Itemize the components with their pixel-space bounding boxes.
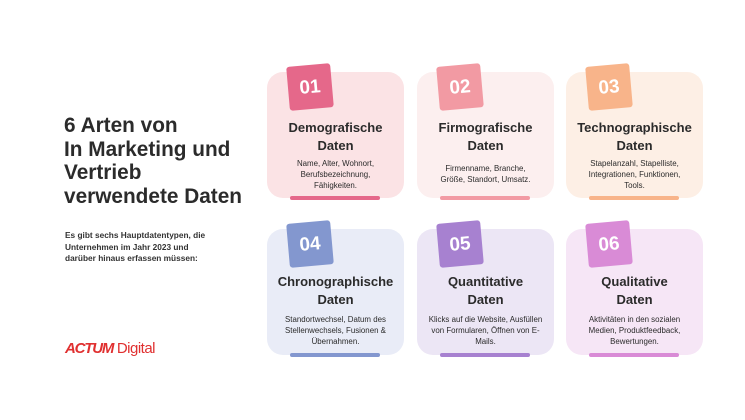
heading: Daten: [317, 138, 354, 152]
text: [297, 159, 374, 190]
heading: Daten: [616, 292, 653, 306]
badge 02: [436, 63, 484, 111]
heading: Firmografische: [439, 120, 532, 135]
panel: 02: [417, 72, 554, 198]
bar 06: [589, 353, 679, 357]
heading: [448, 274, 523, 306]
subtitle: Es gibt sechs Hauptdatentypen, die: [65, 230, 205, 240]
badge 01: 01: [299, 76, 321, 99]
text: Stapelanzahl, Stapelliste,: [590, 159, 679, 168]
text: Standortwechsel, Datum des: [285, 315, 386, 324]
heading: [278, 274, 393, 306]
panel: 05: [417, 229, 554, 355]
text: Klicks auf die Website, Ausfüllen: [429, 315, 542, 324]
heading: [577, 120, 692, 152]
badge 04: 04: [299, 233, 321, 256]
text: [285, 315, 386, 346]
heading: [439, 120, 532, 152]
text: Firmenname, Branche,: [445, 164, 526, 173]
badge 06: 06: [598, 233, 620, 256]
text: [440, 164, 530, 184]
badge 01: [286, 63, 334, 111]
title: verwendete Daten: [64, 184, 242, 208]
text: Tools.: [624, 181, 645, 190]
text: Fähigkeiten.: [314, 181, 357, 190]
bar 03: [589, 196, 679, 200]
text: Größe, Standort, Umsatz.: [441, 175, 530, 184]
bar 05: [440, 353, 530, 357]
panel: 01: [267, 72, 404, 198]
panel: 06: [566, 229, 703, 355]
heading: Chronographische: [278, 274, 393, 289]
title: [64, 114, 242, 208]
subtitle: [65, 230, 205, 263]
bar 04: [290, 353, 380, 357]
title: In Marketing und: [64, 138, 230, 160]
text: Stellenwechsels, Fusionen &: [285, 326, 386, 335]
title: Vertrieb: [64, 161, 141, 184]
logo: ACTUM Digital: [65, 340, 155, 357]
text: [589, 159, 680, 190]
heading: Daten: [467, 292, 504, 306]
heading: Daten: [317, 292, 354, 306]
title: 6 Arten von: [64, 114, 178, 137]
heading: Qualitative: [601, 274, 668, 289]
panel: 04: [267, 229, 404, 355]
badge 03: 03: [598, 76, 620, 99]
text: Bewertungen.: [610, 337, 659, 346]
heading: Daten: [467, 138, 504, 152]
bar 02: [440, 196, 530, 200]
heading: Demografische: [289, 120, 382, 135]
badge 06: [585, 220, 633, 268]
badge 04: [286, 220, 334, 268]
badge 05: 05: [449, 233, 471, 256]
heading: [601, 274, 668, 306]
heading: Daten: [616, 138, 653, 152]
badge 02: 02: [449, 76, 471, 99]
badge 05: [436, 220, 484, 268]
heading: Quantitative: [448, 274, 523, 289]
heading: Technographische: [577, 120, 692, 135]
text: Berufsbezeichnung,: [301, 170, 370, 179]
text: Medien, Produktfeedback,: [589, 326, 680, 335]
text: Mails.: [475, 337, 496, 346]
text: [429, 315, 542, 346]
bar 01: [290, 196, 380, 200]
text: [588, 315, 680, 346]
subtitle: darüber hinaus erfassen müssen:: [65, 253, 198, 263]
text: von Formularen, Öffnen von E-: [431, 326, 540, 335]
text: Aktivitäten in den sozialen: [589, 315, 680, 324]
heading: [289, 120, 382, 152]
text: Integrationen, Funktionen,: [589, 170, 680, 179]
panel: 03: [566, 72, 703, 198]
badge 03: [585, 63, 633, 111]
subtitle: Unternehmen im Jahr 2023 und: [65, 242, 189, 252]
text: Name, Alter, Wohnort,: [297, 159, 374, 168]
text: Übernahmen.: [312, 337, 359, 346]
